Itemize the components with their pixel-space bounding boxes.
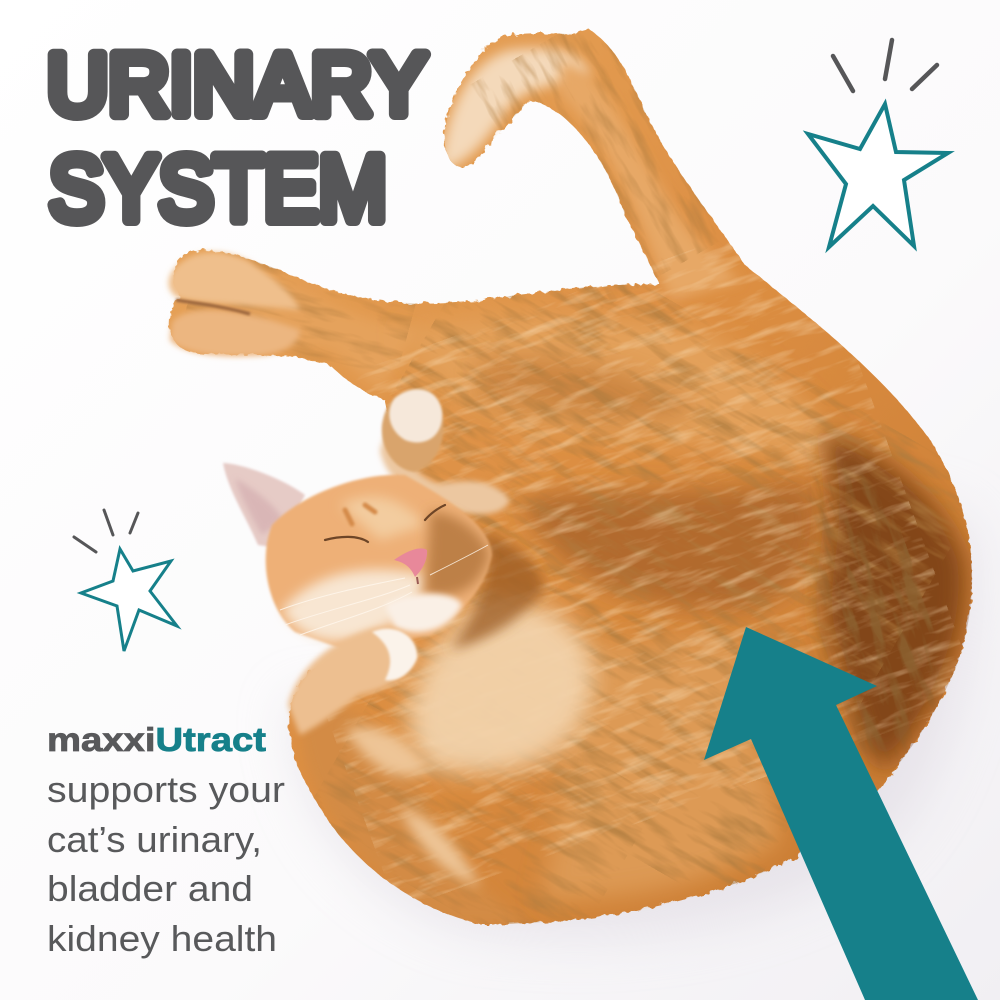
- forearm: [380, 420, 510, 514]
- ear: [223, 463, 305, 548]
- dark flank: [820, 430, 966, 770]
- head shape: [266, 475, 492, 650]
- cat photo illustration: [169, 10, 987, 972]
- back light band: [400, 315, 850, 470]
- fur texture: body dark: [360, 284, 960, 886]
- chin: [385, 594, 462, 632]
- fur texture: hind leg: [186, 252, 416, 368]
- title line 2: SYSTEM: [49, 138, 387, 240]
- upper dark shadow: [480, 357, 700, 421]
- arrow: [704, 627, 978, 1000]
- fur texture: lower leg: [314, 694, 660, 924]
- fur shading: [182, 10, 987, 972]
- text block: product description: [47, 722, 285, 959]
- icon: large star with sparks: [808, 40, 948, 247]
- fur texture: body light: [328, 242, 961, 900]
- front paw at forehead: [380, 389, 510, 514]
- fur texture: tail: [472, 33, 714, 303]
- lower flank: [540, 640, 780, 900]
- right side of face: [425, 512, 490, 596]
- lower left leg: [306, 713, 520, 924]
- forehead stripes: [345, 505, 375, 524]
- cat shadow: [290, 500, 974, 937]
- belly cream: [408, 598, 593, 773]
- description lines: supports your: [47, 769, 285, 810]
- forehead highlight: [340, 497, 425, 540]
- brand name: maxxi Utract: [47, 722, 266, 759]
- tail cream tip: [440, 48, 590, 170]
- nose: [394, 548, 427, 577]
- lower toes: [170, 310, 300, 356]
- fur texture: flank: [814, 470, 940, 751]
- toe gap: [176, 300, 250, 314]
- upper toes: [169, 252, 300, 310]
- leg light: [245, 258, 406, 384]
- text block: product description: cat’s urinary,: [47, 819, 262, 860]
- text block: product description: bladder and: [47, 868, 253, 909]
- whiskers: [280, 545, 488, 635]
- title line 1: URINARY: [47, 37, 427, 133]
- mid fur shadow: [520, 480, 818, 610]
- tail mid: [560, 60, 740, 300]
- leg cream stripes: [345, 727, 480, 885]
- title: [47, 37, 427, 240]
- icon: small star with sparks: [74, 510, 177, 651]
- cat head: [223, 463, 492, 650]
- cheek cream: [282, 570, 425, 641]
- eyes closed: [325, 505, 445, 542]
- cat body and tail: [170, 30, 972, 924]
- lower front paw: [288, 627, 417, 735]
- shadow under head: [450, 530, 545, 650]
- rear paws: [169, 252, 300, 356]
- text block: product description: kidney health: [47, 918, 277, 959]
- toes: [382, 389, 444, 472]
